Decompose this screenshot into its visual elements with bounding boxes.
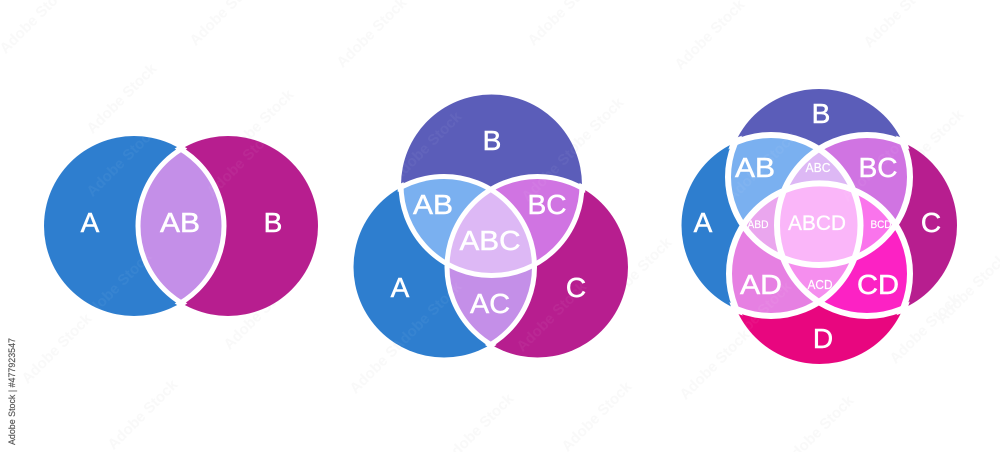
watermark over diagrams <box>78 108 916 355</box>
overlap AC <box>450 268 532 342</box>
four-set venn diagram <box>682 89 957 364</box>
watermark on background: Adobe Stock <box>104 376 182 452</box>
labels: BC <box>528 189 566 220</box>
watermark on background: Adobe Stock <box>550 94 628 171</box>
canvas <box>8 89 957 445</box>
labels: CD <box>857 269 899 300</box>
watermark on background: Adobe Stock <box>83 60 161 137</box>
overlap ABC <box>790 152 848 186</box>
circle D <box>729 183 910 364</box>
watermark over diagrams: Adobe Stock <box>78 248 156 325</box>
overlap outlines <box>136 147 226 305</box>
overlap BC <box>824 138 907 220</box>
labels <box>391 125 586 319</box>
labels: A <box>81 207 100 238</box>
overlap outlines <box>725 132 913 319</box>
stock credit: Adobe Stock | #477923547 <box>7 338 18 445</box>
overlap ABCD <box>780 186 858 262</box>
watermark on background: Adobe Stock <box>886 290 964 367</box>
labels: ABD <box>748 219 769 231</box>
circle B <box>401 94 582 276</box>
watermark over diagrams: Adobe Stock <box>388 278 466 355</box>
watermark over diagrams: Adobe Stock <box>718 278 796 355</box>
labels <box>81 207 282 238</box>
overlap ABC <box>450 192 532 273</box>
labels: AD <box>740 269 782 300</box>
circle A <box>682 135 860 316</box>
labels: AC <box>470 288 510 319</box>
circle B <box>138 136 318 316</box>
labels: B <box>812 98 830 129</box>
labels: C <box>566 272 586 303</box>
labels: ABCD <box>788 212 846 235</box>
circle C <box>777 135 957 316</box>
watermark over diagrams: Adobe Stock <box>388 108 466 185</box>
labels <box>694 98 941 354</box>
overlap CD <box>824 230 907 313</box>
watermark over diagrams: Adobe Stock <box>723 128 801 205</box>
overlap ACD <box>788 263 850 298</box>
watermark over diagrams: Adobe Stock <box>83 123 161 200</box>
labels: AB <box>735 152 775 183</box>
watermark on background: Adobe Stock <box>890 106 968 183</box>
overlap outlines <box>398 174 586 346</box>
labels: ABC <box>806 160 830 175</box>
labels: C <box>921 207 941 238</box>
circle A <box>44 136 224 316</box>
labels: D <box>813 323 833 354</box>
overlap AD <box>732 230 814 313</box>
watermark on background: Adobe Stock <box>18 310 96 387</box>
watermark over diagrams: Adobe Stock <box>203 123 281 200</box>
watermark on background: Adobe Stock <box>676 326 754 403</box>
watermark on background: Adobe Stock <box>598 234 676 311</box>
labels: BC <box>858 152 898 183</box>
labels: A <box>694 207 713 238</box>
overlap ABD <box>746 196 778 252</box>
circle B <box>728 89 910 265</box>
overlap AB <box>404 179 486 260</box>
labels: ABC <box>460 225 520 256</box>
watermark over diagrams: Adobe Stock <box>838 128 916 205</box>
overlap BCD <box>858 196 892 252</box>
circle C <box>447 176 628 358</box>
watermark on background: Adobe Stock <box>220 276 298 353</box>
labels: AB <box>413 189 453 220</box>
labels: ACD <box>808 277 832 292</box>
watermark on background: Adobe Stock <box>346 320 424 397</box>
watermark over diagrams: Adobe Stock <box>513 278 591 355</box>
labels: AB <box>160 207 200 238</box>
three-set venn diagram <box>354 94 628 358</box>
circle A <box>354 176 534 358</box>
overlap AB <box>731 138 814 220</box>
overlap AB <box>140 152 222 300</box>
labels: B <box>264 207 282 238</box>
two-set venn diagram <box>44 136 318 316</box>
watermark on background: Adobe Stock <box>220 86 298 163</box>
labels: A <box>391 272 410 303</box>
labels: B <box>483 125 501 156</box>
overlap BC <box>496 179 580 260</box>
labels: BCD <box>870 219 892 231</box>
watermark over diagrams: Adobe Stock <box>518 128 596 205</box>
